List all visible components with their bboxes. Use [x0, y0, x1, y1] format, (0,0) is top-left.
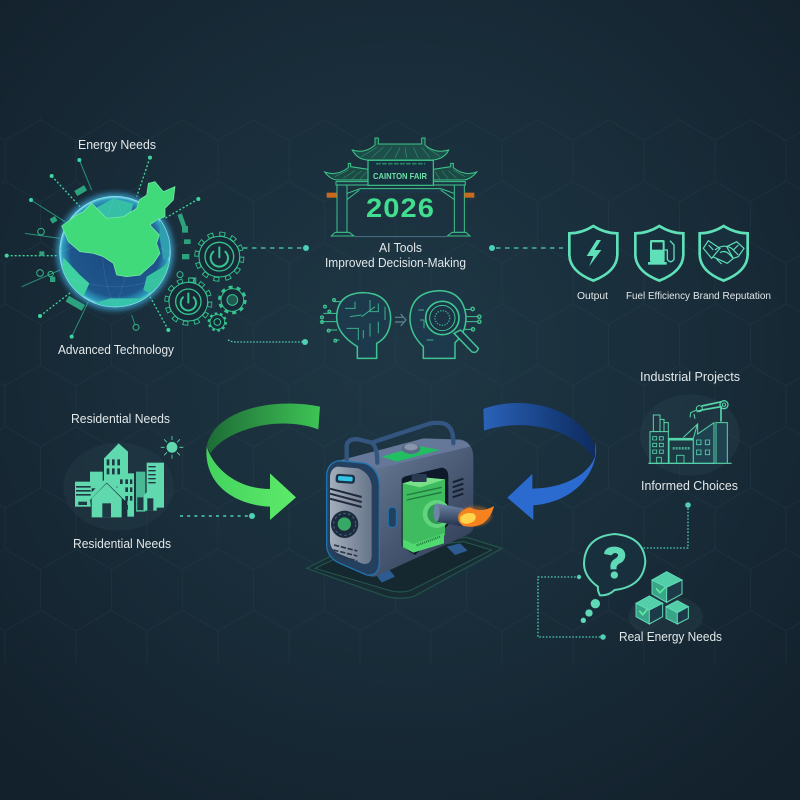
label: Informed Choices: Informed Choices [641, 479, 738, 493]
label: AI Tools: AI Tools [379, 241, 422, 255]
label: Brand Reputation: Brand Reputation [693, 290, 771, 302]
gate sign text: CAINTON FAIR [373, 171, 427, 181]
side roofs [325, 163, 368, 180]
label: Energy Needs: Energy Needs [78, 138, 156, 152]
generator [307, 423, 502, 598]
label: Output: Output [577, 290, 608, 302]
side latch [388, 507, 396, 527]
side vents [453, 479, 463, 497]
engine bay [402, 468, 448, 555]
feet [375, 543, 468, 583]
gears [167, 234, 245, 330]
label: Improved Decision-Making: Improved Decision-Making [325, 256, 466, 270]
shield: handshake [700, 226, 748, 281]
shields row [569, 226, 748, 281]
main roof [352, 138, 449, 160]
globe glow [56, 193, 174, 310]
factory icon [640, 394, 740, 476]
shield: fuel [635, 226, 683, 281]
blue curved arrow [483, 403, 596, 520]
flame [458, 506, 494, 527]
question bubble and cubes [581, 534, 703, 638]
pillars [331, 182, 470, 236]
label: Real Energy Needs: Real Energy Needs [619, 630, 722, 644]
front panel [327, 461, 379, 575]
exhaust pipe [437, 503, 463, 527]
magnifier head right [410, 291, 481, 358]
signboard [368, 160, 433, 185]
fuel cap panel [382, 446, 440, 462]
label: Fuel Efficiency: Fuel Efficiency [626, 290, 691, 302]
cubes [628, 572, 703, 638]
handle [347, 423, 453, 463]
base line [355, 235, 447, 238]
brain head left [321, 293, 391, 358]
shield: output [569, 226, 617, 281]
sun [161, 436, 183, 459]
label: Advanced Technology: Advanced Technology [58, 343, 175, 357]
label: Residential Needs top: Residential Needs [71, 412, 170, 426]
generator platform [307, 537, 502, 598]
year 2026: 2026 [366, 193, 435, 223]
residential buildings icon [63, 436, 183, 531]
engine [403, 477, 445, 553]
green curved arrow [206, 403, 320, 520]
label: Residential Needs bottom: Residential Needs [73, 537, 171, 551]
orange brackets [327, 193, 337, 198]
China map [62, 182, 175, 277]
arrow between heads [395, 314, 406, 326]
rays around globe [5, 156, 200, 339]
Canton Fair gate [325, 138, 477, 237]
globe with China map and tech rays [5, 156, 245, 339]
globe sphere [59, 182, 175, 312]
AI heads with circuits [321, 291, 481, 358]
generator body [337, 438, 473, 577]
question bubble [581, 534, 645, 623]
label: Industrial Projects: Industrial Projects [640, 370, 740, 384]
connector lines [180, 245, 691, 640]
